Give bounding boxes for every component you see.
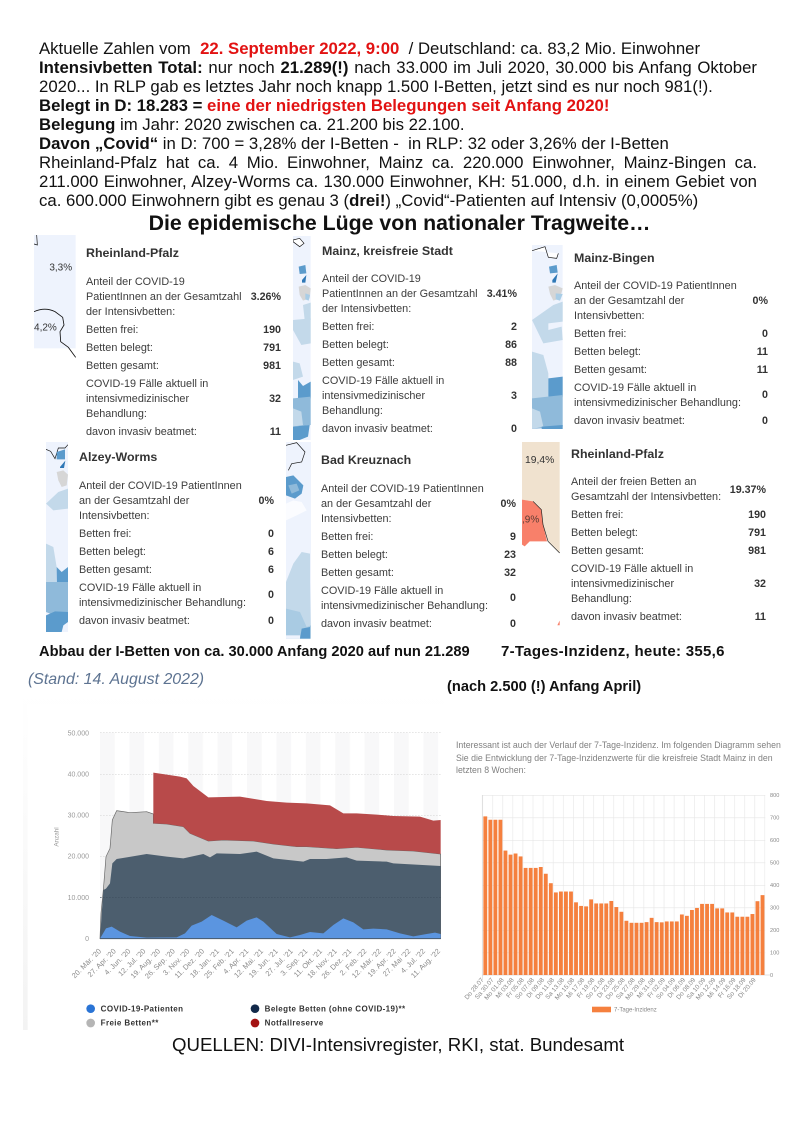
data table: Mainz: Betten frei: [322, 320, 374, 332]
legend: 7-Tage-Inzidenz: 7-Tage-Inzidenz [614, 1008, 657, 1014]
axis: x date labels: 12. Jul. '20 [116, 947, 147, 978]
data table: Bad Kreuznach: Anteil der COVID-19 PatientInnen [321, 482, 484, 494]
data table: Bad Kreuznach: intensivmedizinischer Behandlung: [321, 600, 488, 612]
heading: 7-day incidence: 7-Tages-Inzidenz, heute: 355,6 [501, 643, 725, 660]
data table: Mainz-Bingen: Betten belegt: [574, 346, 641, 358]
data table: Mainz [322, 244, 517, 434]
data table: Mainz-Bingen: Betten gesamt: [574, 364, 647, 376]
data table: Bad Kreuznach: 0 [510, 618, 516, 630]
data table: Alzey-Worms: Intensivbetten: [79, 510, 150, 522]
legend: bed categories: Notfallreserve [265, 1019, 324, 1028]
text block: incidence chart intro [456, 740, 781, 775]
text block: current figures: 2020... In RLP gab es letztes Jahr noch knapp 1.500 I-Betten, jetzt sind es nur noch 981(!). [39, 77, 713, 96]
data table: free beds: Behandlung: [571, 592, 632, 604]
data table: Rheinland-Pfalz: Behandlung: [86, 408, 147, 420]
data table: free beds: Anteil der freien Betten an [571, 476, 696, 488]
legend: 7-Tage-Inzidenz [592, 1007, 657, 1014]
map: Mainz-Bingen region [532, 245, 563, 429]
axis: x date labels: 12. Mai. '21 [232, 947, 265, 980]
axis: y labels [770, 793, 779, 979]
axis: x date labels: Sa 27.08 [615, 976, 637, 1001]
axis: x date labels: Di 20.09 [737, 976, 758, 1000]
data table: Rheinland-Pfalz: der Intensivbetten: [86, 306, 175, 318]
axis: y labels: Anzahl [54, 827, 61, 847]
text block: current figures: Davon „Covid“ in D: 700 = 3,28% der I-Betten - in RLP: 32 oder 3,26% der I-Betten [39, 134, 669, 153]
data table: free beds: Betten frei: [571, 508, 623, 520]
data table: Bad Kreuznach: COVID-19 Fälle aktuell in [321, 584, 443, 596]
axis: x date labels: Sa 10.09 [686, 976, 708, 1001]
text block: current figures: ca. 600.000 Einwohnern gibt es genau 3 (drei!) „Covid“-Patienten auf Intensiv (0,0005%) [39, 191, 698, 210]
axis: y labels: 800 [770, 793, 779, 799]
axis: x date labels [463, 976, 758, 1002]
axis: x date labels: Do 25.08 [605, 976, 627, 1001]
axis: x date labels: Fr 02.09 [646, 976, 667, 1000]
data table: Alzey-Worms: an der Gesamtzahl der [79, 494, 189, 506]
panel: Rheinland-Pfalz COVID share [34, 235, 281, 438]
panel: Mainz, kreisfreie Stadt [293, 236, 517, 440]
axis: x date labels: 20. Mär. '20 [70, 947, 103, 980]
axis: y labels: 300 [770, 906, 779, 912]
data table: Rheinland-Pfalz: 11 [270, 426, 281, 438]
data table: Mainz: 3.41% [487, 288, 517, 300]
data table: Mainz-Bingen: 11 [757, 364, 768, 376]
axis: x date labels: Mo 01.08 [483, 976, 506, 1002]
axis: x date labels: Di 06.09 [666, 976, 687, 1000]
data table: free beds: 19.37% [730, 484, 766, 496]
data table: free beds: intensivmedizinischer [571, 578, 674, 590]
data table: Bad Kreuznach: 0 [510, 592, 516, 604]
data table: Mainz: 88 [505, 356, 517, 368]
axis: x date labels: 4. Apr. '21 [221, 947, 250, 976]
axis: y labels: 600 [770, 838, 779, 844]
text block: current figures: Belegt in D: 18.283 = eine der niedrigsten Belegungen seit Anfang 2020! [39, 96, 609, 115]
map: Alzey-Worms region [46, 442, 68, 632]
axis: x date labels: 19. Jun. '21 [247, 947, 280, 980]
axis: y labels: 200 [770, 928, 779, 934]
data table: Rheinland-Pfalz: Betten belegt: [86, 342, 153, 354]
axis: y labels: 700 [770, 816, 779, 822]
data table: Mainz: Mainz, kreisfreie Stadt [322, 244, 453, 258]
axis: x date labels: Mi 03.08 [495, 976, 516, 1000]
data table: Mainz-Bingen: intensivmedizinischer Behandlung: [574, 396, 741, 408]
axis: x date labels: So 04.09 [655, 976, 677, 1001]
axis: y labels: 100 [770, 950, 779, 956]
panel: Alzey-Worms [46, 442, 274, 632]
data table: Rheinland-Pfalz [86, 246, 281, 438]
data table: Alzey-Worms: 0 [268, 614, 274, 626]
area: free beds [100, 811, 441, 939]
data table: Bad Kreuznach [321, 453, 516, 630]
data table: free beds: Rheinland-Pfalz [571, 447, 664, 461]
axis: y labels: 0 [770, 973, 773, 979]
bars: daily incidence [483, 816, 764, 975]
data table: Mainz-Bingen: 0 [762, 328, 768, 340]
map: Bad Kreuznach region [286, 442, 311, 639]
data table: Rheinland-Pfalz: Betten gesamt: [86, 360, 159, 372]
axis: y labels: 30.000 [68, 813, 89, 820]
data table: Mainz-Bingen [574, 251, 768, 426]
legend: bed categories: Freie Betten** [101, 1019, 159, 1028]
axis: x date labels: 19. Aug. '20 [129, 947, 162, 980]
data table: Bad Kreuznach: Betten frei: [321, 530, 373, 542]
data table: Bad Kreuznach: 0% [501, 498, 516, 510]
axis: y labels: 40.000 [68, 772, 89, 779]
data table: Mainz: Anteil der COVID-19 [322, 272, 421, 284]
data table: free beds: 32 [754, 578, 766, 590]
map: Rheinland-Pfalz free-bed share: 19,4% [525, 455, 554, 466]
data table: free beds [571, 447, 766, 622]
data table: Mainz-Bingen: 0% [753, 294, 768, 306]
axis: y labels: 0 [85, 936, 89, 943]
axis: x date labels: Sa 30.07 [474, 976, 496, 1001]
text block: sources: QUELLEN: DIVI-Intensivregister, RKI, stat. Bundesamt [172, 1034, 624, 1055]
axis: x date labels: 3. Nov. '20 [161, 947, 191, 977]
axis: x date labels: Fr 19.08 [576, 976, 597, 1000]
data table: Mainz: Betten gesamt: [322, 356, 395, 368]
chart: 7-day incidence bar chart [463, 793, 780, 1014]
data table: Alzey-Worms: Betten belegt: [79, 546, 146, 558]
data table: Mainz-Bingen: COVID-19 Fälle aktuell in [574, 382, 696, 394]
data table: Alzey-Worms: 0 [268, 589, 274, 601]
legend: bed categories: Belegte Betten (ohne COVID-19)** [265, 1005, 406, 1014]
axis: x date labels [70, 947, 442, 981]
axis: x date labels: 19. Apr. '22 [366, 947, 398, 979]
map: Mainz region [293, 236, 311, 440]
text block: current figures: Rheinland-Pfalz hat ca. 4 Mio. Einwohner, Mainz ca. 220.000 Einwohner, Mainz-Bingen ca. [39, 153, 757, 172]
data table: Mainz-Bingen: Betten frei: [574, 328, 626, 340]
axis: x date labels: 11. Dez. '20 [173, 947, 206, 980]
axis: x date labels: Mo 15.08 [554, 976, 577, 1002]
data table: Alzey-Worms: intensivmedizinischer Behandlung: [79, 596, 246, 608]
text block: current figures: Belegung im Jahr: 2020 zwischen ca. 21.200 bis 22.100. [39, 115, 464, 134]
text block: current figures [39, 39, 757, 210]
map: Rheinland-Pfalz occupancy: 4,2% [34, 322, 57, 333]
data table: Bad Kreuznach: davon invasiv beatmet: [321, 618, 432, 630]
data table: Alzey-Worms: Anteil der COVID-19 PatientInnen [79, 480, 242, 492]
data table: free beds: COVID-19 Fälle aktuell in [571, 562, 693, 574]
data table: Bad Kreuznach: Intensivbetten: [321, 512, 392, 524]
text block: current figures: Intensivbetten Total: nur noch 21.289(!) nach 33.000 im Juli 2020, 30.000 bis Anfang Oktober [39, 58, 757, 77]
data table: free beds: 981 [748, 544, 766, 556]
data table: Rheinland-Pfalz: Betten frei: [86, 324, 138, 336]
data table: Rheinland-Pfalz: COVID-19 Fälle aktuell in [86, 378, 208, 390]
data table: Bad Kreuznach: Bad Kreuznach [321, 453, 411, 467]
data table: Rheinland-Pfalz: davon invasiv beatmet: [86, 426, 197, 438]
data table: Mainz: Behandlung: [322, 404, 383, 416]
data table: Mainz: 2 [511, 320, 517, 332]
axis: x date labels: Mo 12.09 [695, 976, 718, 1002]
data table: Alzey-Worms: COVID-19 Fälle aktuell in [79, 582, 201, 594]
text block: incidence chart intro: Interessant ist auch der Verlauf der 7-Tage-Inzidenz. Im folgenden Diagramm sehen [456, 740, 781, 750]
axis: x date labels: Fr 05.08 [505, 976, 526, 1000]
data table: Mainz: der Intensivbetten: [322, 302, 411, 314]
data table: Bad Kreuznach: Betten belegt: [321, 548, 388, 560]
data table: Rheinland-Pfalz: Rheinland-Pfalz [86, 246, 179, 260]
data table: free beds: Betten belegt: [571, 526, 638, 538]
axis: x date labels: 27. Apr. '20 [86, 947, 118, 979]
axis: x date labels: Di 23.08 [596, 976, 617, 1000]
axis: x date labels: 3. Sep. '21 [278, 947, 309, 978]
axis: x date labels: 12. Mär. '22 [350, 947, 383, 980]
data table: Bad Kreuznach: Betten gesamt: [321, 566, 394, 578]
text block: current figures: Aktuelle Zahlen vom 22. September 2022, 9:00 / Deutschland: ca. 83,2 Mio. Einwohner [39, 39, 700, 58]
axis: x date labels: Sa 13.08 [544, 976, 566, 1001]
data table: free beds: Betten gesamt: [571, 544, 644, 556]
data table: Bad Kreuznach: 32 [504, 566, 516, 578]
data table: Bad Kreuznach: 9 [510, 530, 516, 542]
data table: Mainz: COVID-19 Fälle aktuell in [322, 374, 444, 386]
data table: Mainz: Betten belegt: [322, 338, 389, 350]
axis: x date labels: 27. Jul. '21 [263, 947, 295, 978]
text block: incidence chart intro: letzten 8 Wochen: [456, 765, 526, 775]
axis: x date labels: 18. Jan. '21 [188, 947, 221, 980]
area: COVID-19 patients [100, 915, 441, 939]
data table: Mainz-Bingen: 0 [762, 389, 768, 401]
area: occupied beds without COVID [100, 852, 441, 939]
axis: y labels: 50.000 [68, 730, 89, 737]
heading: bed reduction: Abbau der I-Betten von ca. 30.000 Anfang 2020 auf nun 21.289 [39, 644, 470, 660]
data table: free beds: 190 [748, 508, 766, 520]
data table: Alzey-Worms: 6 [268, 546, 274, 558]
axis: x date labels: 26. Dez. '21 [320, 947, 353, 981]
data table: free beds: 791 [748, 526, 766, 538]
heading: note on April value: (nach 2.500 (!) Anfang April) [447, 679, 641, 695]
axis: x date labels: Di 09.08 [525, 976, 546, 1000]
data table: Mainz: intensivmedizinischer [322, 390, 425, 402]
heading: main title: Die epidemische Lüge von nationaler Tragweite… [149, 211, 650, 235]
data table: Rheinland-Pfalz: 32 [269, 392, 281, 404]
data table: Alzey-Worms [79, 450, 274, 626]
axis: x date labels: So 21.08 [585, 976, 607, 1001]
text block: incidence chart intro: Sie die Entwicklung der 7-Tage-Inzidenzwerte für die kreisfreie Stadt Mainz in den [456, 753, 773, 763]
data table: free beds: davon invasiv beatmet: [571, 610, 682, 622]
axis: x date labels: Mi 14.09 [706, 976, 728, 1000]
axis: x date labels: 11. Aug. '22 [409, 947, 442, 980]
axis: x date labels: Do 08.09 [675, 976, 698, 1001]
data table: Mainz: davon invasiv beatmet: [322, 422, 433, 434]
data table: Mainz-Bingen: Intensivbetten: [574, 310, 645, 322]
axis: x date labels: 4. Jul. '22 [399, 947, 427, 975]
axis: x date labels: 4. Jun. '20 [102, 947, 132, 977]
axis: x date labels: Do 11.08 [534, 976, 556, 1001]
axis: x date labels: So 18.09 [726, 976, 748, 1001]
data table: Mainz-Bingen: 11 [757, 346, 768, 358]
caption: chart date: (Stand: 14. August 2022) [28, 671, 204, 688]
axis: x date labels: 2. Feb. '22 [338, 947, 368, 977]
panel: Rheinland-Pfalz free beds [522, 442, 766, 626]
data table: Mainz: PatientInnen an der Gesamtzahl [322, 288, 478, 300]
data table: Rheinland-Pfalz: 981 [263, 360, 281, 372]
legend: bed categories: COVID-19-Patienten [101, 1005, 183, 1014]
data table: Alzey-Worms: 0 [268, 528, 274, 540]
axis: y labels: 10.000 [68, 895, 89, 902]
area: emergency reserve [153, 773, 441, 854]
data table: Bad Kreuznach: an der Gesamtzahl der [321, 498, 431, 510]
data table: Rheinland-Pfalz: 190 [263, 324, 281, 336]
map: Rheinland-Pfalz occupancy [34, 235, 76, 358]
data table: Mainz-Bingen: 0 [762, 414, 768, 426]
data table: Mainz: 0 [511, 422, 517, 434]
axis: x date labels: 18. Nov. '21 [305, 947, 339, 980]
data table: Rheinland-Pfalz: PatientInnen an der Gesamtzahl [86, 290, 242, 302]
data table: Rheinland-Pfalz: Anteil der COVID-19 [86, 276, 185, 288]
axis: x date labels: 11. Okt. '21 [292, 947, 324, 979]
data table: Mainz-Bingen: davon invasiv beatmet: [574, 414, 685, 426]
axis: x date labels: 25. Feb. '21 [202, 947, 236, 980]
axis: y labels [54, 730, 89, 943]
map: Rheinland-Pfalz occupancy: 3,3% [49, 262, 72, 273]
data table: Alzey-Worms: 6 [268, 564, 274, 576]
data table: Mainz: 86 [505, 338, 517, 350]
data table: Alzey-Worms: davon invasiv beatmet: [79, 614, 190, 626]
data table: Mainz: 3 [511, 390, 517, 402]
map: Rheinland-Pfalz free-bed share [522, 442, 560, 626]
data table: Rheinland-Pfalz: 3.26% [251, 290, 281, 302]
chart: intensive care beds area chart [23, 730, 442, 1030]
data table: Rheinland-Pfalz: 791 [263, 342, 281, 354]
data table: Mainz-Bingen: an der Gesamtzahl der [574, 294, 684, 306]
panel: Bad Kreuznach [286, 442, 516, 639]
legend: bed categories [86, 1004, 406, 1028]
data table: Rheinland-Pfalz: intensivmedizinischer [86, 392, 189, 404]
axis: x date labels: Mi 17.08 [565, 976, 587, 1000]
axis: x date labels: 26. Sep. '20 [143, 947, 177, 981]
axis: x date labels: So 07.08 [514, 976, 536, 1001]
data table: Alzey-Worms: Betten gesamt: [79, 564, 152, 576]
data table: Alzey-Worms: Alzey-Worms [79, 450, 157, 464]
axis: x date labels: Mo 29.08 [624, 976, 647, 1002]
map: Rheinland-Pfalz free-bed share: ,9% [522, 514, 539, 525]
axis: y labels: 400 [770, 883, 779, 889]
axis: x date labels: Fr 16.09 [717, 976, 738, 1000]
axis: y labels: 500 [770, 860, 779, 866]
axis: x date labels: Do 28.07 [463, 976, 486, 1001]
data table: free beds: Gesamtzahl der Intensivbetten: [571, 490, 721, 502]
axis: x date labels: Mi 31.08 [636, 976, 657, 1000]
data table: Bad Kreuznach: 23 [504, 548, 516, 560]
data table: Alzey-Worms: Betten frei: [79, 528, 131, 540]
axis: x date labels: 27. Mai '22 [381, 947, 412, 978]
data table: free beds: 11 [755, 610, 766, 622]
axis: y labels: 20.000 [68, 854, 89, 861]
data table: Mainz-Bingen: Anteil der COVID-19 PatientInnen [574, 280, 737, 292]
data table: Mainz-Bingen: Mainz-Bingen [574, 251, 655, 265]
data table: Alzey-Worms: 0% [259, 494, 274, 506]
text block: current figures: 211.000 Einwohner, Alzey-Worms ca. 130.000 Einwohner, KH: 51.000, d.h. in einem Gebiet von [39, 172, 757, 191]
panel: Mainz-Bingen [532, 245, 768, 429]
